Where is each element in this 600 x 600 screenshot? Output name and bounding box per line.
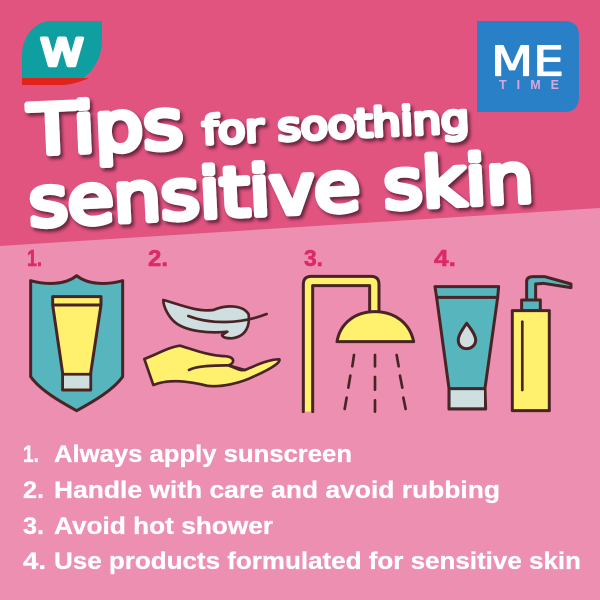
tips list: Always apply sunscreen xyxy=(54,441,352,468)
logo: ME Time: ME xyxy=(491,38,564,86)
title: sensitive skin xyxy=(27,139,535,243)
tips list: 1. xyxy=(23,441,39,468)
logo: Watsons xyxy=(22,20,102,85)
step numbers xyxy=(27,245,456,271)
tips list: Avoid hot shower xyxy=(54,513,273,540)
step numbers: 4. xyxy=(434,245,456,271)
step numbers: 2. xyxy=(148,245,168,271)
logo: ME Time: TIME xyxy=(499,78,559,92)
tips list: Use products formulated for sensitive skin xyxy=(54,548,581,575)
tips list xyxy=(23,441,581,575)
header panel xyxy=(0,0,600,246)
icon: shield with sunscreen tube xyxy=(31,276,123,411)
tips list: 4. xyxy=(23,548,46,575)
tips list: Handle with care and avoid rubbing xyxy=(54,477,500,504)
title xyxy=(26,86,535,243)
logo: ME Time xyxy=(477,21,579,112)
step numbers: 1. xyxy=(27,245,42,271)
title: for soothing xyxy=(201,97,470,154)
icon: cream tube with drop xyxy=(435,287,499,409)
title: Tips xyxy=(26,86,185,171)
icon: shower xyxy=(303,276,414,412)
logo: Watsons: w xyxy=(40,20,84,78)
step numbers: 3. xyxy=(304,245,323,271)
tips list: 3. xyxy=(23,513,44,540)
icon: feather above hand xyxy=(144,300,280,386)
tips list: 2. xyxy=(23,477,44,504)
icon: pump bottle xyxy=(512,277,571,411)
